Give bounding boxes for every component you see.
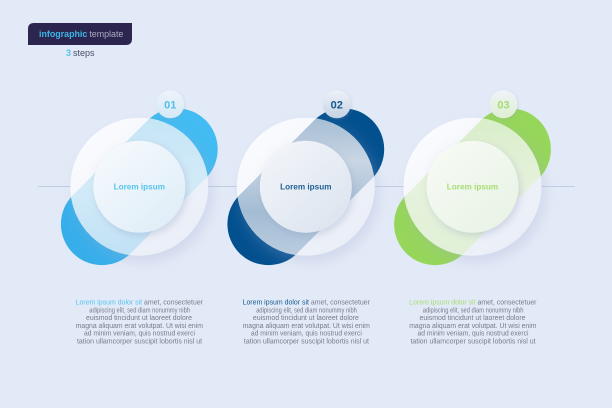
step 1 description text xyxy=(76,300,204,346)
step 3 label: Lorem ipsum xyxy=(447,183,498,192)
step 2 description text: ad minim veniam, quis nostrud exerci xyxy=(251,331,362,338)
step 1 number badge: 01 xyxy=(164,99,176,111)
step 2 description text: magna aliquam erat volutpat. Ut wisi enim xyxy=(243,323,370,330)
step 1 graphic xyxy=(60,90,218,266)
step 1 inner circle xyxy=(93,141,185,233)
step 1 label: Lorem ipsum xyxy=(114,183,165,192)
step 3 description text xyxy=(409,300,537,346)
step 2 tinted band xyxy=(238,118,374,255)
step 1 number badge xyxy=(156,90,184,118)
subtitle: 3 steps: 3steps xyxy=(66,48,95,58)
step 3 coloured capsule xyxy=(435,149,510,224)
step 1 coloured capsule xyxy=(102,149,177,224)
step 3 number badge: 03 xyxy=(497,99,510,111)
step 2 number badge: 02 xyxy=(331,99,343,111)
step 1 tinted band xyxy=(71,118,208,255)
step 3 description text: adipiscing elit, sed diam nonummy nibh xyxy=(423,307,524,314)
step 3 description text: tation ullamcorper suscipit lobortis nisl ut xyxy=(410,338,536,346)
step 3 tinted band xyxy=(404,118,541,255)
step 3 description text: magna aliquam erat volutpat. Ut wisi enim xyxy=(409,323,537,330)
step 1 glass circle xyxy=(70,118,208,256)
step 3 number badge xyxy=(490,90,518,118)
step 3 description text: Lorem ipsum dolor sit amet, consectetuer xyxy=(409,300,537,306)
step 2 inner circle xyxy=(260,141,352,233)
step 2 glass circle xyxy=(237,118,375,256)
step 2 description text: Lorem ipsum dolor sit amet, consectetuer xyxy=(243,300,371,306)
step 1 description text: magna aliquam erat volutpat. Ut wisi enim xyxy=(76,323,203,330)
header label: infographic template: infographictemplate xyxy=(39,29,123,39)
horizontal connecting line xyxy=(38,186,575,188)
step 1 description text: tation ullamcorper suscipit lobortis nisl ut xyxy=(77,338,202,346)
step 2 description text xyxy=(243,300,371,346)
step 3 description text: ad minim veniam, quis nostrud exerci xyxy=(418,331,529,338)
header label: infographic template xyxy=(28,23,132,45)
step 1 description text: ad minim veniam, quis nostrud exerci xyxy=(84,331,195,338)
step 1 description text: adipiscing elit, sed diam nonummy nibh xyxy=(89,307,190,314)
step 2 label: Lorem ipsum xyxy=(280,183,332,192)
step 2 coloured capsule xyxy=(268,149,343,224)
step 2 number badge xyxy=(323,90,351,118)
step 3 glass circle xyxy=(404,118,542,256)
step 2 description text: tation ullamcorper suscipit lobortis nisl ut xyxy=(244,338,369,346)
step 3 description text: euismod tincidunt ut laoreet dolore xyxy=(420,315,526,322)
step 1 description text: euismod tincidunt ut laoreet dolore xyxy=(86,315,192,322)
step 2 description text: adipiscing elit, sed diam nonummy nibh xyxy=(256,307,357,314)
step 2 description text: euismod tincidunt ut laoreet dolore xyxy=(253,315,359,322)
step 2 graphic xyxy=(227,90,384,266)
step 3 graphic xyxy=(394,90,551,266)
step 3 inner circle xyxy=(426,141,518,233)
step 1 description text: Lorem ipsum dolor sit amet, consectetuer xyxy=(76,300,204,306)
